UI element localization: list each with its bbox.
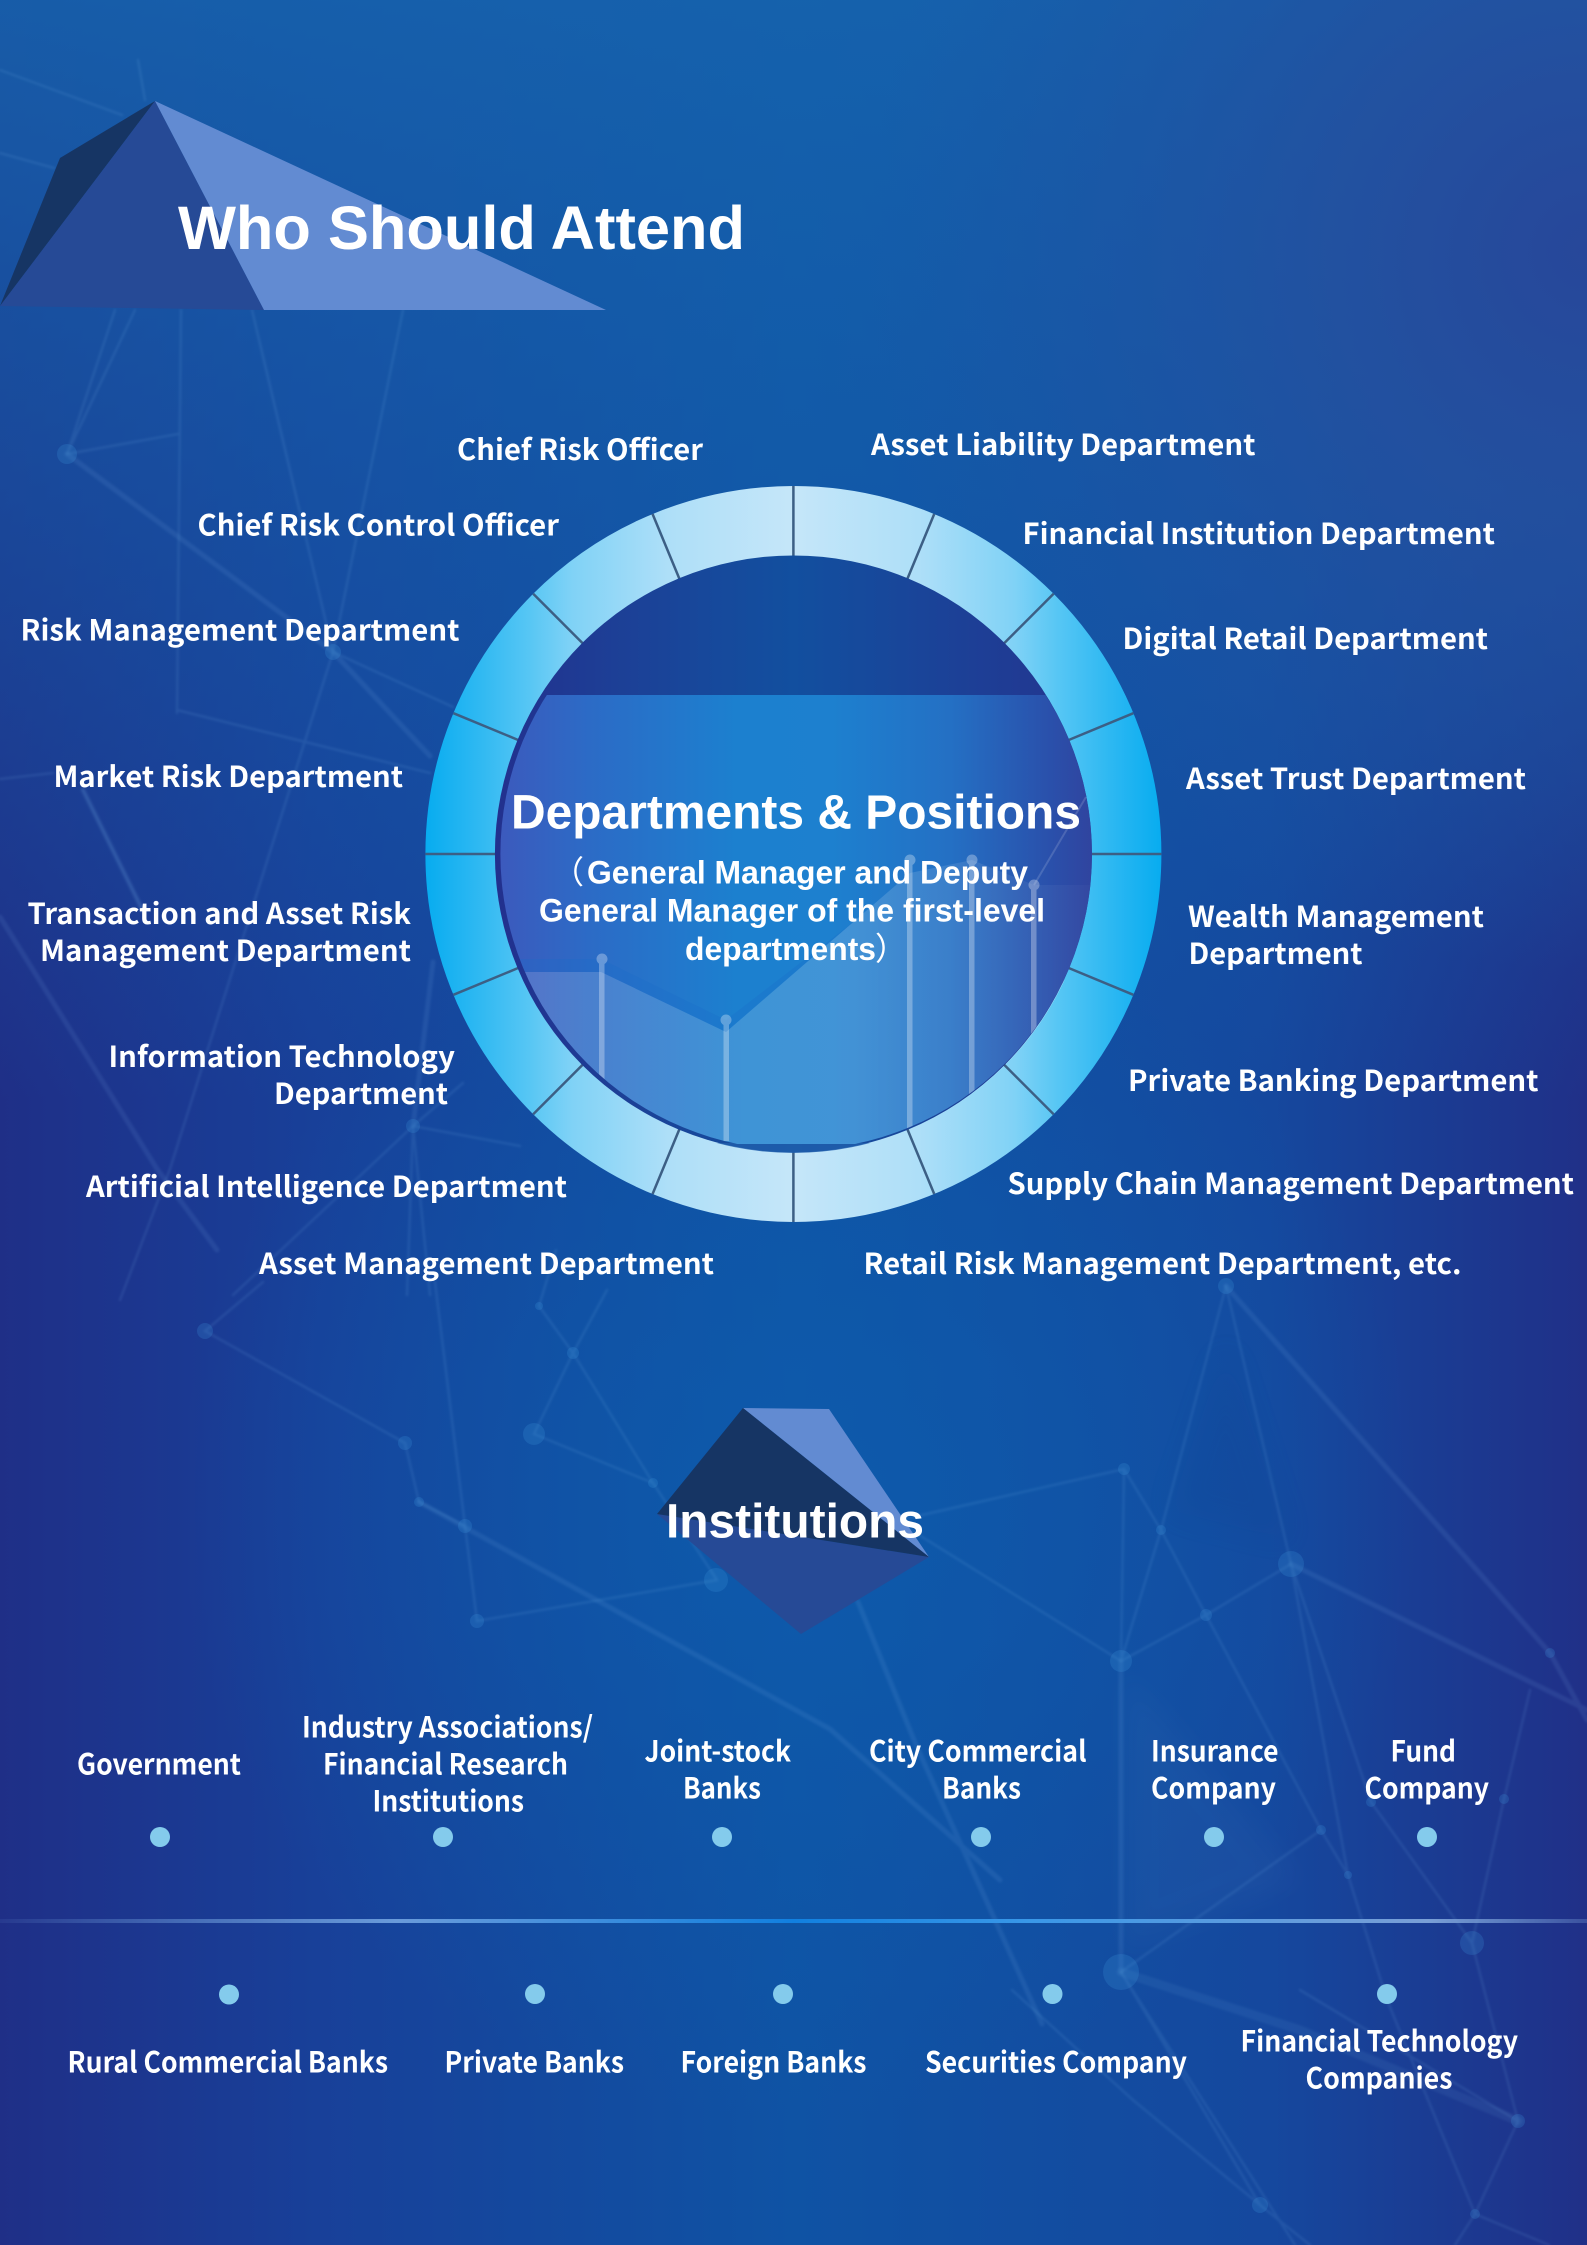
center heading: Departments & Positions [511,786,1081,840]
institutions top row [77,1704,1489,1847]
institution: city commercial banks: City Commercial [869,1728,1086,1770]
label: Chief Risk Control Officer [198,502,559,544]
institution: associations: Institutions [372,1778,524,1820]
institution: foreign banks: Foreign Banks [680,2040,866,2082]
label: Asset Trust Department [1185,756,1526,798]
label: Asset Management Department [258,1241,714,1283]
decorative triangle: title [0,101,606,310]
institution: insurance company [1151,1728,1278,1847]
title: Who Should Attend [178,194,745,262]
institution: associations: Financial Research [323,1742,568,1784]
institution: insurance company: Company [1151,1766,1276,1808]
institution: joint-stock banks [644,1728,791,1847]
label: Retail Risk Management Department, etc. [864,1241,1462,1283]
label: Management Department [40,928,411,970]
institution: joint-stock banks: Joint-stock [644,1728,791,1770]
label: Artificial Intelligence Department [85,1164,567,1206]
label [108,1034,455,1113]
institution: private banks: Private Banks [444,2040,624,2082]
label: Department [1188,931,1362,973]
institution: government: Government [77,1742,241,1784]
divider line [0,1919,1587,1923]
circular diagram [425,486,1161,1222]
center subheading: General Manager and Deputy [587,854,1028,890]
label: Supply Chain Management Department [1008,1161,1574,1203]
institution: insurance company: Insurance [1151,1728,1278,1770]
ring [425,486,1161,1222]
label: Market Risk Department [54,754,403,796]
center subheading: General Manager of the first-level [539,892,1045,928]
institution: rural commercial banks [68,1984,388,2082]
label: Digital Retail Department [1122,616,1488,658]
background network nodes [57,444,1555,2219]
institution: securities company: Securities Company [925,2040,1187,2082]
label: Wealth Management [1188,894,1484,936]
institution: city commercial banks [869,1728,1086,1847]
institution: foreign banks [680,1984,866,2082]
center subheading: ） [875,924,907,970]
institution: fund company: Company [1364,1766,1489,1808]
label: Financial Institution Department [1022,511,1495,553]
center subheading [539,848,1045,970]
label: Asset Liability Department [870,422,1256,464]
institution: government [77,1742,241,1847]
label [1188,894,1484,973]
institutions bottom row [68,1984,1518,2098]
center subheading: departments [685,931,876,967]
inner disc [495,556,1092,1152]
institution: city commercial banks: Banks [942,1766,1021,1808]
institution: associations: Industry Associations/ [302,1704,593,1746]
institution: joint-stock banks: Banks [683,1766,761,1808]
label: Department [274,1071,448,1113]
center subheading: （ [552,848,584,894]
institution: associations [302,1704,593,1847]
label: Information Technology [108,1034,455,1076]
labels: positions and departments [20,422,1574,1283]
label: Transaction and Asset Risk [28,891,411,933]
label [28,891,411,970]
institution: financial technology companies [1240,1984,1518,2098]
institution: rural commercial banks: Rural Commercial Banks [68,2040,388,2082]
line chart illustration [480,695,1100,1160]
label: Chief Risk Officer [457,427,703,469]
institution: securities company [925,1984,1187,2082]
decorative diamond: institutions [657,1408,929,1634]
institutions heading: Institutions [666,1496,924,1548]
institution: fund company: Fund [1390,1728,1456,1770]
label: Risk Management Department [20,608,460,650]
institution: financial technology companies: Financial Technology [1240,2018,1518,2060]
label: Private Banking Department [1128,1058,1538,1100]
institution: financial technology companies: Companies [1306,2056,1452,2098]
institution: private banks [444,1984,624,2082]
institution: fund company [1364,1728,1489,1847]
